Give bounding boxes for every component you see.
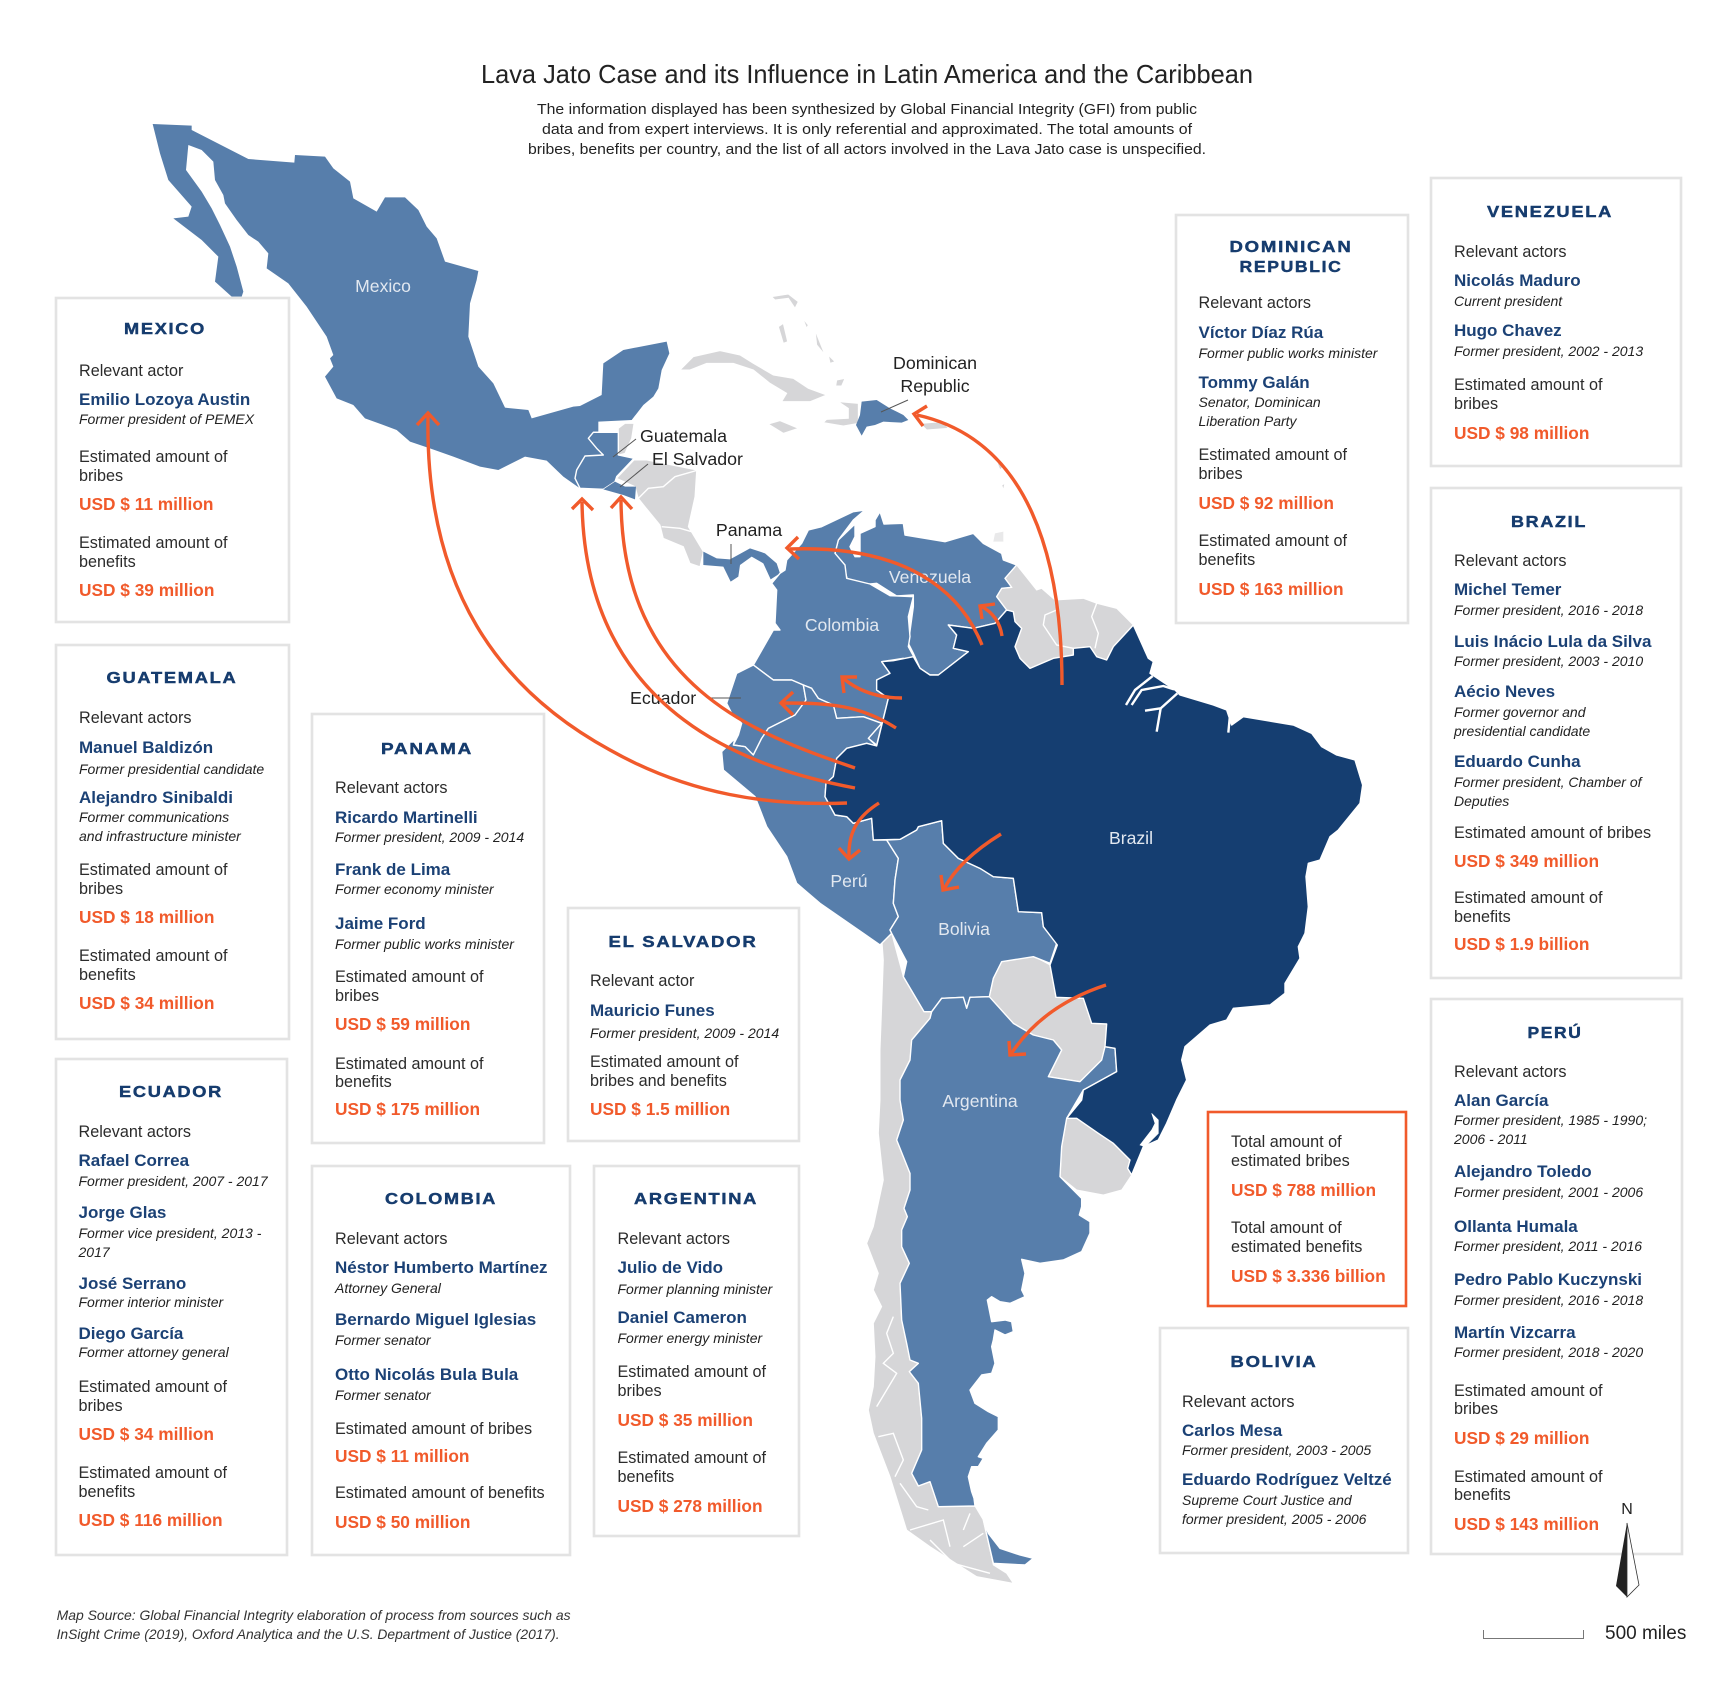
panel: Brazil: USD $ 349 million [1454,851,1599,871]
panel: Perú: benefits [1454,1486,1511,1504]
panel: totals [1208,1112,1406,1306]
intro text: data and from expert interviews. It is only referential and approximated. The total amounts of [542,121,1193,138]
panel: Colombia: Bernardo Miguel Iglesias [335,1310,536,1329]
panel: Bolivia: Former president, 2003 - 2005 [1182,1442,1371,1458]
panel: Guatemala: Estimated amount of [79,947,228,965]
panel: Panama: Relevant actors [335,779,447,797]
panel: Brazil: Former president, 2003 - 2010 [1454,653,1643,669]
panel: Mexico: Former president of PEMEX [79,411,255,427]
arrow: Brazil to Colombia [842,677,902,698]
map: Paraguay [989,956,1107,1082]
panel: Guatemala: Relevant actors [79,709,191,727]
panel: Guatemala: Manuel Baldizón [79,738,213,757]
panel: Mexico: Relevant actor [79,362,184,380]
source note: Map Source: Global Financial Integrity elaboration of process from sources such as [57,1608,571,1623]
panel: Brazil: Aécio Neves [1454,682,1555,701]
panel: Panama [312,714,544,1143]
panel: Dominican Republic [1176,215,1408,623]
panel: Ecuador: bribes [78,1397,123,1415]
map: Chile and Uruguay [867,933,1132,1583]
map label: Dominican Republic: Republic [900,376,970,396]
panel: Argentina: benefits [618,1468,674,1486]
panel: Dominican Republic: Relevant actors [1198,294,1311,312]
panel: Panama: Former economy minister [335,881,495,897]
panel: Venezuela [1431,178,1681,466]
map label: Guatemala: Guatemala [640,426,727,446]
panel: Venezuela: VENEZUELA [1487,204,1613,221]
panel: Brazil: Former governor and [1454,704,1587,720]
panel: Perú: Former president, 2018 - 2020 [1454,1344,1643,1360]
panel: Colombia: Otto Nicolás Bula Bula [335,1365,519,1384]
map label: Venezuela: Venezuela [889,567,971,587]
panel: Guatemala: USD $ 18 million [79,907,214,927]
panel: Panama: PANAMA [381,741,473,758]
panel: Brazil: Michel Temer [1454,580,1562,599]
panel: Mexico: Estimated amount of [79,448,228,466]
panel: Argentina: Former planning minister [618,1281,774,1297]
panel: Panama: Frank de Lima [335,860,451,879]
panel: Argentina: Estimated amount of [618,1363,766,1381]
panel: Ecuador: Former interior minister [78,1294,225,1310]
panel: Perú: Ollanta Humala [1454,1217,1578,1236]
map label: Ecuador: Ecuador [630,688,696,708]
panel: Brazil: Eduardo Cunha [1454,752,1581,771]
panel: Ecuador [56,1059,287,1555]
panel: Bolivia: former president, 2005 - 2006 [1182,1511,1367,1527]
arrow: Brazil to Dominican Republic [914,406,1062,685]
panel: Guatemala: GUATEMALA [106,670,238,687]
panel: Perú: Relevant actors [1454,1063,1566,1081]
map: Ecuador, Peru and Bolivia [722,665,1057,1012]
panel: Panama: Estimated amount of [335,968,484,986]
map: Argentina [897,997,1117,1565]
panel: Mexico: MEXICO [124,321,206,338]
intro text: bribes, benefits per country, and the list of all actors involved in the Lava Jato case is unspecified. [528,141,1206,158]
panel: Dominican Republic: USD $ 163 million [1198,579,1344,599]
map label: Dominican Republic [881,353,977,412]
panel: Dominican Republic: REPUBLIC [1240,259,1342,276]
intro text: The information displayed has been synthesized by Global Financial Integrity (GFI) from public [537,101,1197,118]
panel: Colombia: USD $ 50 million [335,1512,470,1532]
panel: Ecuador: Former vice president, 2013 - [78,1225,262,1241]
panel: Argentina: USD $ 35 million [618,1410,753,1430]
panel: El Salvador: Mauricio Funes [590,1001,715,1020]
scale bar: 500 miles [1605,1623,1686,1644]
map label: Panama: Panama [716,520,782,540]
panel: Argentina: Relevant actors [618,1230,730,1248]
panel: Ecuador: ECUADOR [119,1084,223,1101]
panel: Panama: bribes [335,987,379,1005]
panel: Brazil: Luis Inácio Lula da Silva [1454,632,1652,651]
panel: Brazil: USD $ 1.9 billion [1454,934,1589,954]
panel: Perú: bribes [1454,1400,1498,1418]
map: Brazil [825,610,1363,1175]
panel: Brazil: BRAZIL [1511,514,1587,531]
panel: Argentina: bribes [618,1382,662,1400]
panel: Perú [1431,999,1682,1554]
arrow: Brazil to El Salvador [611,497,855,768]
panel: Bolivia: Eduardo Rodríguez Veltzé [1182,1470,1392,1489]
panel: El Salvador: Relevant actor [590,972,695,990]
panel: Perú: Former president, 2016 - 2018 [1454,1292,1643,1308]
panel: Guatemala: bribes [79,880,123,898]
panel: Guatemala: benefits [79,966,136,984]
map label: Brazil: Brazil [1109,828,1153,848]
panel: Venezuela: USD $ 98 million [1454,423,1589,443]
panel: Dominican Republic: USD $ 92 million [1198,493,1334,513]
panel: Guatemala: Former presidential candidate [79,761,264,777]
panel: Venezuela: Nicolás Maduro [1454,271,1581,290]
panel: Dominican Republic: Former public works minister [1198,345,1379,361]
panel: Perú: Former president, 2011 - 2016 [1454,1238,1642,1254]
panel: Colombia [312,1166,570,1555]
map: Mexico [153,124,669,488]
panel: El Salvador: USD $ 1.5 million [590,1099,730,1119]
panel: Ecuador: Former president, 2007 - 2017 [78,1173,269,1189]
panel: Panama: Jaime Ford [335,914,426,933]
panel: Argentina [594,1166,799,1536]
panel: Ecuador: USD $ 116 million [78,1510,223,1530]
panel: Ecuador: Estimated amount of [78,1378,227,1396]
panel: Venezuela: Estimated amount of [1454,376,1603,394]
panel: Brazil: benefits [1454,908,1511,926]
panel: Perú: Martín Vizcarra [1454,1323,1576,1342]
panel: Mexico: USD $ 11 million [79,494,213,514]
source note [57,1608,571,1642]
panel: Panama: benefits [335,1073,392,1091]
panel: El Salvador [568,908,799,1141]
panel: totals: USD $ 788 million [1231,1180,1376,1200]
panel: Bolivia: Supreme Court Justice and [1182,1492,1353,1508]
panel: Ecuador: Diego García [78,1324,184,1343]
panel: Dominican Republic: Estimated amount of [1198,446,1347,464]
panel: Dominican Republic: Tommy Galán [1198,373,1310,392]
panel: Brazil: Relevant actors [1454,552,1566,570]
panel: Ecuador: benefits [78,1483,135,1501]
panel: Brazil: Former president, 2016 - 2018 [1454,602,1643,618]
panel: Guatemala: Alejandro Sinibaldi [79,788,233,807]
arrow: Brazil to Peru [839,803,879,859]
map: Colombia [753,510,918,745]
panel: Brazil: presidential candidate [1453,723,1590,739]
panel: Brazil: Estimated amount of bribes [1454,824,1651,842]
map: Guianas [993,532,1133,668]
panel: Mexico: benefits [79,553,136,571]
map label: Colombia: Colombia [805,615,879,635]
map label: Bolivia: Bolivia [938,919,990,939]
panel: El Salvador: Estimated amount of [590,1053,739,1071]
map of Latin America and the Caribbean [153,124,1363,1583]
compass: north arrow [1616,1501,1639,1597]
panel: Venezuela: Former president, 2002 - 2013 [1454,343,1643,359]
panel: Argentina: Julio de Vido [618,1258,723,1277]
panel: Ecuador: USD $ 34 million [78,1424,214,1444]
panel: Brazil: Former president, Chamber of [1454,774,1644,790]
map label: Panama [716,520,782,564]
panel: Brazil: Deputies [1454,793,1509,809]
panel: totals: Total amount of [1231,1133,1342,1151]
panel: Perú: Alejandro Toledo [1454,1162,1592,1181]
panel: Colombia: Attorney General [334,1280,442,1296]
panel: Venezuela: Relevant actors [1454,243,1566,261]
panel: Perú: 2006 - 2011 [1453,1131,1528,1147]
panel: Colombia: Former senator [335,1387,432,1403]
panel: Panama: Former president, 2009 - 2014 [335,829,524,845]
panel: Perú: Pedro Pablo Kuczynski [1454,1270,1642,1289]
panel: Brazil [1431,488,1681,978]
panel: totals: estimated benefits [1231,1238,1362,1256]
panel: Guatemala: Former communications [79,809,229,825]
panel: Guatemala: and infrastructure minister [79,828,242,844]
panel: Perú: Estimated amount of [1454,1468,1603,1486]
panel: Ecuador: Jorge Glas [78,1203,166,1222]
panel: Perú: USD $ 29 million [1454,1428,1589,1448]
panel: Ecuador: Estimated amount of [78,1464,227,1482]
title: Lava Jato Case and its Influence in Latin America and the Caribbean [481,59,1253,89]
panel: Dominican Republic: bribes [1198,465,1243,483]
map label: Dominican Republic: Dominican [893,353,977,373]
panel: El Salvador: EL SALVADOR [608,934,758,951]
panel: Panama: Ricardo Martinelli [335,808,478,827]
panel: Colombia: USD $ 11 million [335,1446,469,1466]
map label: El Salvador [620,449,743,487]
panel: Panama: USD $ 59 million [335,1014,470,1034]
map: Central America [575,423,780,582]
panel: Mexico: USD $ 39 million [79,580,214,600]
panel: Guatemala [56,645,289,1039]
panel: Ecuador: Former attorney general [78,1344,230,1360]
arrow: Brazil to Mexico [417,413,847,803]
panel: Guatemala: USD $ 34 million [79,993,214,1013]
map label: Mexico: Mexico [355,276,411,296]
panel: Mexico: Emilio Lozoya Austin [79,390,250,409]
panel: Brazil: Estimated amount of [1454,889,1603,907]
map label: Guatemala [613,426,727,457]
panel: Bolivia: BOLIVIA [1230,1354,1318,1371]
panel: Colombia: Estimated amount of bribes [335,1420,532,1438]
map: Venezuela [835,512,1017,675]
map: Caribbean islands [680,294,1005,490]
panel: Colombia: COLOMBIA [385,1191,497,1208]
panel: Dominican Republic: Víctor Díaz Rúa [1198,323,1324,342]
panel: Colombia: Estimated amount of benefits [335,1484,545,1502]
map label: El Salvador: El Salvador [652,449,743,469]
panel: Bolivia [1160,1328,1408,1553]
panel: Venezuela: Hugo Chavez [1454,321,1562,340]
intro text [528,101,1206,158]
arrow: Brazil to Guatemala [572,499,855,788]
panel: Bolivia: Carlos Mesa [1182,1421,1283,1440]
compass: north arrow: N [1621,1501,1633,1518]
panel: Bolivia: Relevant actors [1182,1393,1294,1411]
map label: Perú: Perú [830,871,868,891]
panel: Dominican Republic: Estimated amount of [1198,532,1347,550]
map label: Ecuador [630,688,741,708]
arrow: Brazil to Bolivia [941,834,1001,890]
panel: Ecuador: José Serrano [78,1274,186,1293]
panel: Panama: Estimated amount of [335,1055,484,1073]
panel: totals: USD $ 3.336 billion [1231,1266,1386,1286]
panel: Perú: USD $ 143 million [1454,1514,1599,1534]
panel: Venezuela: Current president [1454,293,1563,309]
panel: Perú: Estimated amount of [1454,1382,1603,1400]
panel: Dominican Republic: DOMINICAN [1230,239,1352,256]
arrow: Brazil to Ecuador [781,692,896,728]
panel: Argentina: Former energy minister [618,1330,764,1346]
panel: Ecuador: 2017 [78,1244,111,1260]
panel: Venezuela: bribes [1454,395,1498,413]
panel: Perú: Former president, 1985 - 1990; [1454,1112,1647,1128]
panel: Perú: Alan García [1454,1091,1549,1110]
panel: Mexico [56,298,289,622]
arrow: Brazil to Panama [787,537,982,645]
map label: Argentina: Argentina [942,1091,1018,1111]
panel: Dominican Republic: Liberation Party [1198,413,1298,429]
source note: InSight Crime (2019), Oxford Analytica and the U.S. Department of Justice (2017). [57,1627,560,1642]
panel: El Salvador: Former president, 2009 - 2014 [590,1025,779,1041]
arrow: Brazil to Venezuela [980,604,1002,636]
scale bar [1484,1623,1686,1644]
arrow: Brazil to Argentina [1009,985,1106,1055]
panel: Guatemala: Estimated amount of [79,861,228,879]
panel: Colombia: Néstor Humberto Martínez [335,1258,548,1277]
panel: Mexico: Estimated amount of [79,534,228,552]
panel: Colombia: Former senator [335,1332,432,1348]
panel: Argentina: USD $ 278 million [618,1496,763,1516]
panel: totals: Total amount of [1231,1219,1342,1237]
panel: Perú: Former president, 2001 - 2006 [1454,1184,1643,1200]
panel: Dominican Republic: Senator, Dominican [1198,394,1321,410]
panel: Argentina: ARGENTINA [634,1191,758,1208]
panel: totals: estimated bribes [1231,1152,1350,1170]
panel: Ecuador: Relevant actors [78,1123,191,1141]
panel: Dominican Republic: benefits [1198,551,1255,569]
panel: Panama: Former public works minister [335,936,515,952]
panel: Argentina: Estimated amount of [618,1449,766,1467]
panel: El Salvador: bribes and benefits [590,1072,727,1090]
panel: Perú: PERÚ [1528,1023,1582,1042]
panel: Colombia: Relevant actors [335,1230,447,1248]
panel: Argentina: Daniel Cameron [618,1308,747,1327]
panel: Ecuador: Rafael Correa [78,1151,190,1170]
panel: Mexico: bribes [79,467,123,485]
panel: Panama: USD $ 175 million [335,1099,480,1119]
